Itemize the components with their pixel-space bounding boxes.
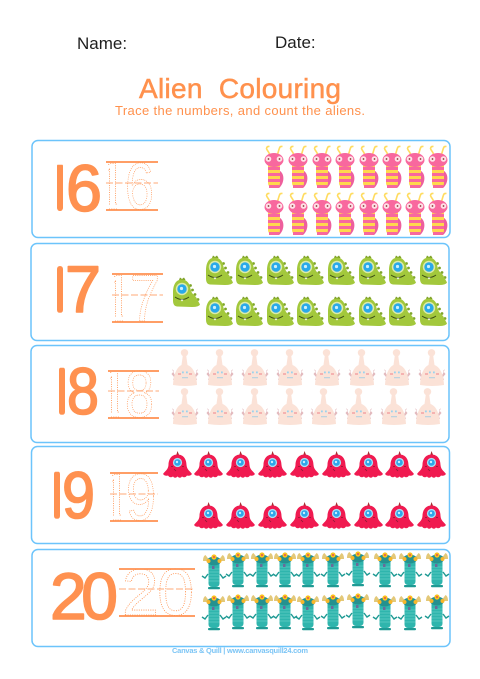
tracing lines and number 19 [110, 472, 158, 522]
big number 18: 1 [42, 354, 79, 428]
tracing lines and number 19: 1 [97, 460, 134, 534]
aliens: pale pink monsters [172, 349, 446, 425]
big number 19 [54, 471, 93, 520]
tracing lines and number 20: 20 [122, 555, 194, 629]
panel: number 18 [31, 346, 449, 442]
big number 16: 1 [40, 151, 77, 225]
name label: Name: [77, 34, 127, 53]
tracing lines and number 18: 1 [95, 357, 132, 431]
panel: number 16 [32, 140, 450, 238]
big number 17: 7 [65, 252, 101, 326]
tracing lines and number 17 [112, 273, 163, 323]
subtitle: Trace the numbers, and count the aliens. [115, 103, 365, 118]
tracing lines and number 16: 6 [125, 149, 154, 223]
tracing lines and number 17: 1 [99, 261, 136, 335]
tracing lines and number 16: 1 [93, 149, 130, 223]
big number 19: 1 [37, 458, 74, 532]
date label: Date: [275, 33, 316, 52]
panel: number 20 [32, 550, 450, 646]
tracing lines and number 18: 8 [125, 357, 154, 431]
aliens: teal robots [202, 551, 449, 630]
big number 19: 9 [62, 458, 95, 532]
tracing lines and number 17: 7 [130, 261, 160, 335]
big number 18: 8 [67, 354, 99, 428]
tracing lines and number 19: 9 [126, 460, 156, 534]
big number 16: 6 [66, 151, 102, 225]
big number 17: 1 [40, 252, 77, 326]
panel: number 19 [32, 446, 450, 544]
tracing lines and number 18 [108, 370, 159, 419]
title: Alien Colouring [139, 73, 341, 104]
tracing lines and number 16 [106, 161, 158, 211]
big number 20: 20 [50, 559, 118, 633]
big number 18 [59, 366, 98, 416]
panel: number 17 [31, 244, 449, 340]
aliens: pink worms [264, 146, 448, 235]
aliens: red octopus monsters [163, 451, 446, 529]
footer credit: Canvas & Quill | www.canvasquill24.com [172, 646, 308, 655]
big number 16 [57, 164, 100, 212]
aliens: green monsters [173, 256, 447, 326]
big number 17 [57, 266, 99, 313]
